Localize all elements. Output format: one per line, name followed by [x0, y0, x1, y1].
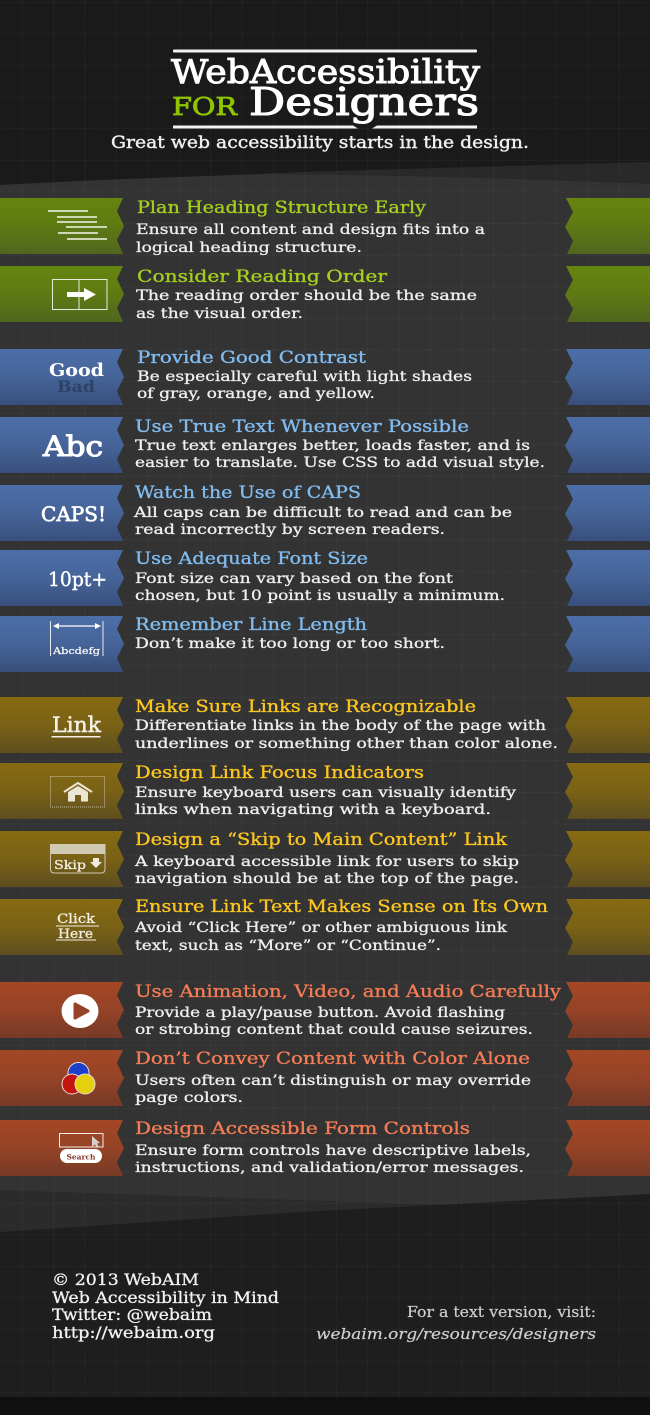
item: animation [0, 982, 650, 1038]
heading: Use Adequate Font Size [135, 549, 368, 569]
body text line 2: easier to translate. Use CSS to add visual style. [135, 455, 545, 471]
ribbon right [565, 697, 650, 753]
body text: Provide a play/pause button. Avoid flashing [135, 1005, 505, 1021]
icon: caps: CAPS! [41, 502, 106, 526]
website: http://webaim.org [52, 1324, 215, 1342]
section: structure (green) [0, 198, 650, 322]
item: line length [0, 615, 650, 672]
item: form controls [0, 1119, 650, 1176]
ribbon left [0, 899, 124, 955]
body text: The reading order should be the same [136, 288, 477, 304]
heading: Plan Heading Structure Early [137, 198, 426, 218]
text version url: webaim.org/resources/designers [316, 1325, 596, 1343]
body text line 2: navigation should be at the top of the page. [135, 871, 519, 887]
upper band transition [0, 162, 650, 190]
icon: search form [60, 1134, 103, 1163]
ribbon left [0, 616, 124, 672]
body text line 2: underlines or something other than color alone. [135, 736, 558, 752]
heading: Use True Text Whenever Possible [135, 417, 469, 437]
icon: 10pt: 10pt+ [48, 567, 107, 591]
heading: Don’t Convey Content with Color Alone [135, 1049, 530, 1069]
item: caps [0, 483, 650, 541]
icon: click here [56, 912, 99, 942]
body text: Be especially careful with light shades [137, 369, 472, 385]
heading: Consider Reading Order [137, 267, 388, 287]
ribbon right [565, 550, 650, 606]
ribbon right [565, 1050, 650, 1106]
ribbon left [0, 831, 124, 887]
ribbon right [565, 349, 650, 405]
body text: Differentiate links in the body of the page with [135, 718, 546, 734]
text version label: For a text version, visit: [407, 1303, 596, 1321]
heading: Use Animation, Video, and Audio Carefully [135, 982, 561, 1002]
ribbon right [565, 616, 650, 672]
footer background [0, 1194, 650, 1397]
section: media and forms (red) [0, 982, 650, 1176]
icon: line length [50, 621, 103, 657]
ribbon left [0, 485, 124, 541]
ribbon left [0, 982, 124, 1038]
heading: Design Link Focus Indicators [135, 763, 424, 783]
icon: bad: Bad [57, 377, 95, 396]
body text: Ensure keyboard users can visually identify [135, 785, 516, 801]
tagline: Great web accessibility starts in the design. [111, 133, 529, 153]
icon: heading lines [48, 211, 107, 239]
item: link text [0, 897, 650, 955]
icon: skip link: Skip [54, 858, 86, 872]
icon: line length: Abcdefg [52, 646, 100, 657]
footer credits [52, 1271, 279, 1342]
ribbon right [565, 1120, 650, 1176]
title block [111, 50, 529, 153]
ribbon left [0, 1050, 124, 1106]
body text: All caps can be difficult to read and can be [133, 505, 512, 521]
body text: Ensure all content and design fits into a [136, 222, 485, 238]
title bottom rule [173, 126, 477, 128]
heading: Make Sure Links are Recognizable [135, 697, 476, 717]
heading: Watch the Use of CAPS [135, 483, 361, 503]
item: color [0, 1049, 650, 1106]
body text line 2: or strobing content that could cause seizures. [135, 1022, 533, 1038]
body text line 2: links when navigating with a keyboard. [135, 802, 491, 818]
ribbon left [0, 697, 124, 753]
heading: Provide Good Contrast [137, 348, 366, 368]
icon: reading order arrow [52, 280, 107, 310]
ribbon left [0, 266, 124, 322]
body text line 2: read incorrectly by screen readers. [135, 522, 445, 538]
item: font size [0, 549, 650, 606]
item: reading order [0, 266, 650, 322]
icon: search form: Search [66, 1152, 96, 1162]
body text: Font size can vary based on the font [135, 571, 453, 587]
heading: Design Accessible Form Controls [135, 1119, 470, 1139]
item: contrast [0, 348, 650, 405]
ribbon right [565, 982, 650, 1038]
icon: abc: Abc [42, 430, 103, 463]
title word: for: FOR [172, 93, 238, 121]
icon: link: Link [52, 713, 101, 737]
icon: play button [62, 994, 98, 1028]
title top rule [173, 50, 477, 52]
icon: color circles [62, 1062, 95, 1094]
ribbon right [565, 899, 650, 955]
body text: Avoid “Click Here” or other ambiguous link [134, 920, 508, 936]
ribbon right [565, 417, 650, 473]
ribbon left [0, 550, 124, 606]
body text: A keyboard accessible link for users to skip [134, 854, 519, 870]
body text line 2: text, such as “More” or “Continue”. [135, 938, 441, 954]
icon: click here: Here [58, 927, 93, 942]
heading: Ensure Link Text Makes Sense on Its Own [135, 897, 548, 917]
text version link [316, 1303, 596, 1343]
heading: Design a “Skip to Main Content” Link [135, 830, 508, 850]
icon: skip link [50, 844, 106, 873]
ribbon right [565, 485, 650, 541]
ribbon right [565, 266, 650, 322]
icon: click here: Click [57, 912, 95, 927]
central panel background [0, 174, 650, 1215]
icon: good: Good [49, 360, 104, 381]
body text: Ensure form controls have descriptive labels, [135, 1143, 531, 1159]
heading: Remember Line Length [135, 615, 367, 635]
body text line 2: chosen, but 10 point is usually a minimum. [135, 588, 505, 604]
ribbon right [565, 198, 650, 254]
ribbon left [0, 417, 124, 473]
title line one: WebAccessibility [171, 52, 480, 91]
lower band transition [0, 1190, 650, 1240]
item: true text [0, 417, 650, 473]
body text: Users often can’t distinguish or may override [135, 1073, 531, 1089]
title word: designers: Designers [249, 80, 479, 124]
tagline: Web Accessibility in Mind [52, 1289, 279, 1307]
ribbon left [0, 763, 124, 819]
item: focus indicators [0, 763, 650, 819]
ribbon right [565, 831, 650, 887]
ribbon left [0, 1120, 124, 1176]
body text line 2: as the visual order. [136, 306, 303, 322]
icon: home focus [50, 776, 104, 807]
twitter: Twitter: @webaim [52, 1306, 212, 1324]
copyright: © 2013 WebAIM [52, 1271, 199, 1289]
ribbon left [0, 198, 124, 254]
ribbon right [565, 763, 650, 819]
section: text (blue) [0, 348, 650, 672]
footer bottom strip [0, 1397, 650, 1415]
body text: Don’t make it too long or too short. [135, 636, 445, 652]
body text: True text enlarges better, loads faster, and is [135, 438, 530, 454]
item: recognizable links [0, 697, 650, 753]
body text line 2: of gray, orange, and yellow. [137, 386, 375, 402]
body text line 2: logical heading structure. [136, 240, 362, 256]
item: skip link [0, 830, 650, 887]
ribbon left [0, 349, 124, 405]
section: links (yellow) [0, 697, 650, 955]
body text line 2: page colors. [135, 1090, 243, 1106]
body text line 2: instructions, and validation/error messages. [135, 1160, 524, 1176]
item: plan heading structure [0, 198, 650, 256]
